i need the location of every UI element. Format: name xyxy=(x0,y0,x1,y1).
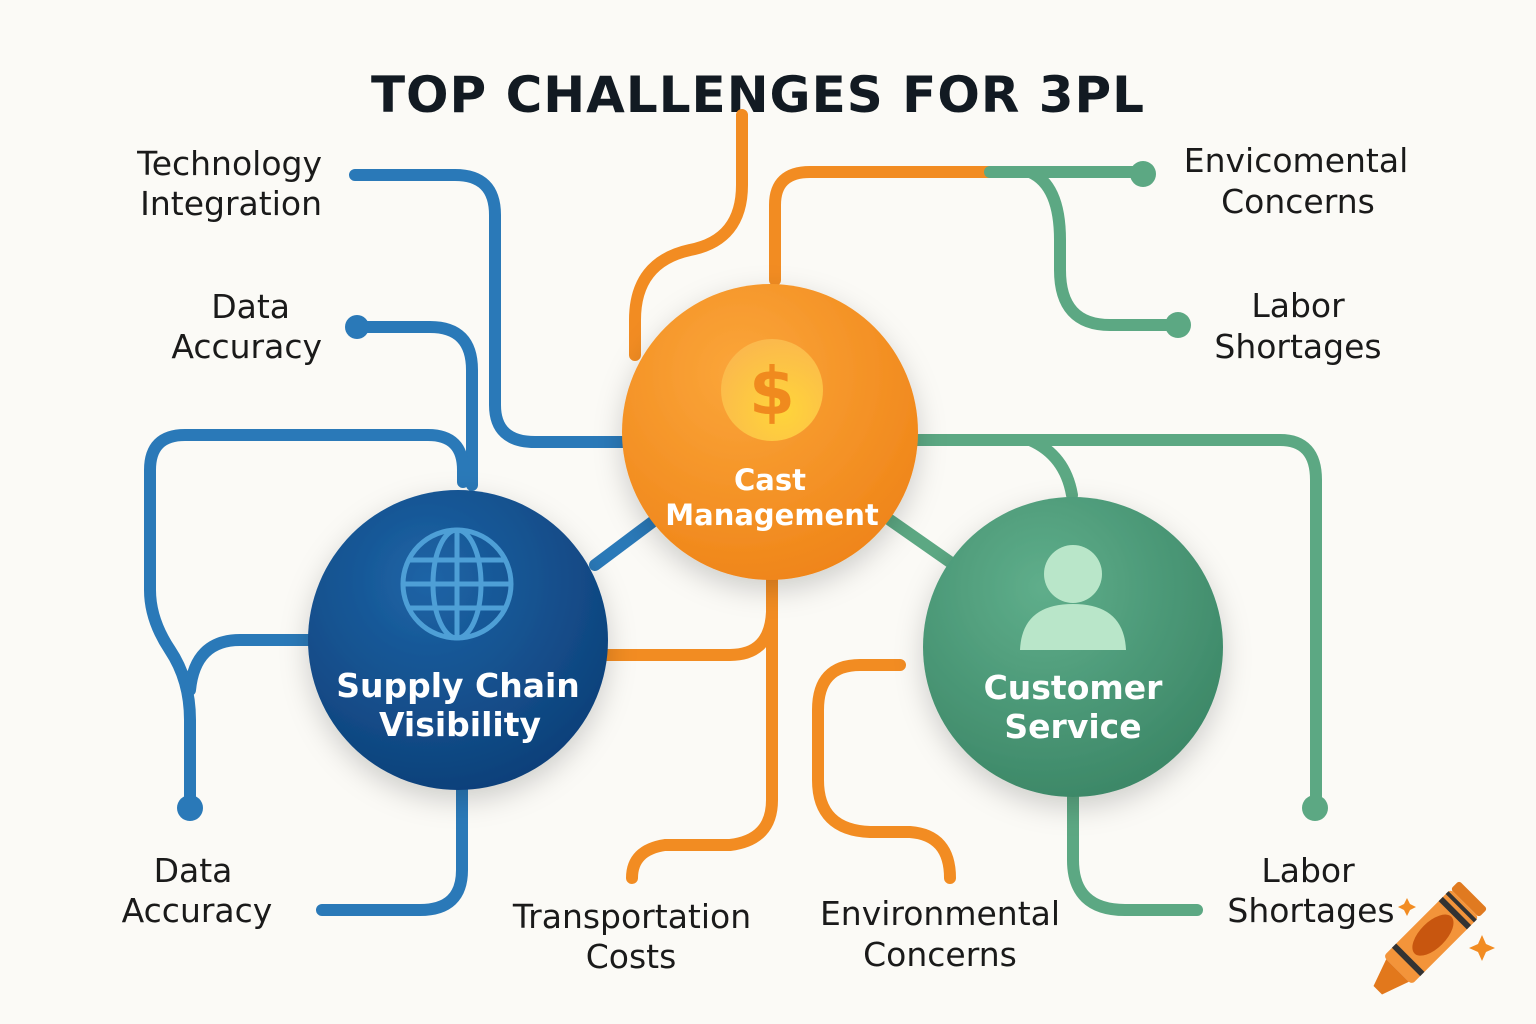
icon: dollar coin: $ xyxy=(749,353,795,430)
label: Environmental Concerns bottom: Concerns xyxy=(863,935,1017,974)
connector dots: green xyxy=(1130,161,1328,821)
label: Transportation Costs: Costs xyxy=(586,937,676,976)
label: Labor Shortages bottom: Shortages xyxy=(1227,891,1395,930)
label: Environmental Concerns bottom xyxy=(820,894,1060,974)
label: Environmental Concerns top: Concerns xyxy=(1221,182,1375,221)
connector dots: blue xyxy=(177,315,369,821)
label: Labor Shortages top: Labor xyxy=(1251,286,1345,325)
label: Transportation Costs xyxy=(512,897,751,976)
label: Transportation Costs: Transportation xyxy=(512,897,751,936)
label: Data Accuracy top xyxy=(171,287,322,366)
label: Data Accuracy top: Accuracy xyxy=(171,327,322,366)
label: Environmental Concerns top: Envicomental xyxy=(1184,141,1408,180)
icon: crayon xyxy=(1364,881,1495,1004)
connector lines: orange xyxy=(600,115,990,878)
node: Customer Service xyxy=(923,497,1223,797)
connector lines: blue xyxy=(150,175,655,910)
label: Technology Integration: Technology xyxy=(136,144,322,183)
node: Customer Service: Service xyxy=(1004,707,1142,746)
node: Customer Service: Customer xyxy=(984,668,1163,707)
icon: dollar coin xyxy=(721,339,823,441)
label: Technology Integration: Integration xyxy=(140,184,322,223)
node: Supply Chain Visibility: Visibility xyxy=(379,705,541,744)
label: Data Accuracy bottom: Data xyxy=(154,851,232,890)
connector lines: green xyxy=(890,172,1316,910)
node: Cost Management: Management xyxy=(665,498,879,532)
icon: person xyxy=(1020,545,1126,650)
node: Supply Chain Visibility: Supply Chain xyxy=(336,666,580,705)
node: Cost Management xyxy=(622,284,918,580)
icon: globe xyxy=(403,530,511,638)
label: Data Accuracy bottom: Accuracy xyxy=(122,891,272,930)
label: Labor Shortages bottom: Labor xyxy=(1261,851,1355,890)
label: Technology Integration xyxy=(136,144,322,223)
label: Data Accuracy bottom xyxy=(122,851,272,930)
label: Environmental Concerns bottom: Environmental xyxy=(820,894,1060,933)
label: Environmental Concerns top xyxy=(1184,141,1408,221)
label: Labor Shortages top: Shortages xyxy=(1214,327,1382,366)
node: Supply Chain Visibility xyxy=(308,490,608,790)
label: Labor Shortages top xyxy=(1214,286,1382,366)
title: TOP CHALLENGES FOR 3PL xyxy=(371,66,1145,124)
label: Labor Shortages bottom xyxy=(1227,851,1395,930)
node: Cost Management: Cast xyxy=(734,463,806,497)
label: Data Accuracy top: Data xyxy=(211,287,290,326)
